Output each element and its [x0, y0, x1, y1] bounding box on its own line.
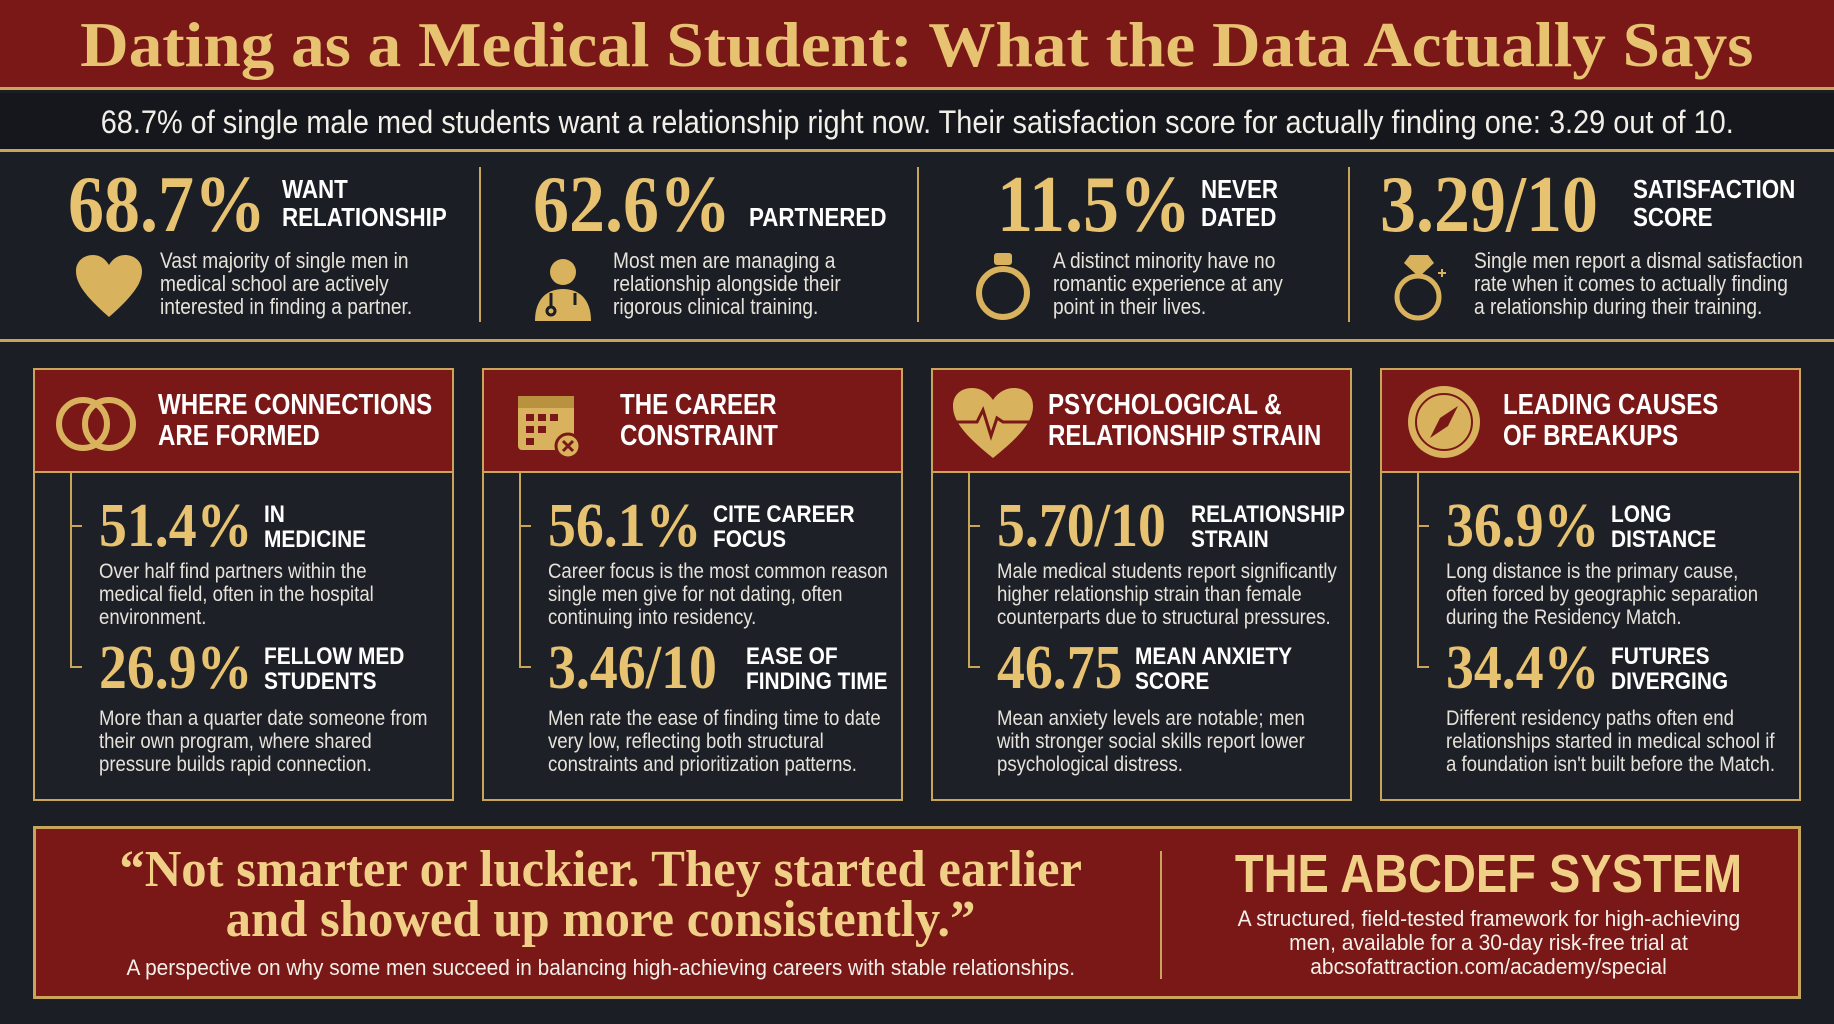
panel: career constraint: Men rate the ease of finding time to date: [548, 707, 881, 730]
panel: career constraint: very low, reflecting both structural: [548, 730, 824, 753]
panel: where connections are formed: MEDICINE: [264, 526, 366, 553]
ABCDEF system: A structured, field-tested framework for high-achieving: [1237, 906, 1740, 931]
panel: where connections are formed: 51.4%: [99, 492, 252, 560]
icon: ring: [976, 253, 1030, 320]
stat: never dated: NEVER: [1201, 174, 1278, 204]
panel: career constraint: THE CAREER: [620, 389, 776, 421]
panel: psychological strain: counterparts due to structural pressures.: [997, 606, 1331, 629]
quote caption: A perspective on why some men succeed in balancing high-achieving careers with stable relationships.: [127, 955, 1075, 980]
panel: where connections are formed: Over half find partners within the: [99, 560, 367, 583]
title: Dating as a Medical Student: What the Data Actually Says: [80, 9, 1754, 80]
stat: never dated: [976, 161, 1283, 320]
stat: 3.46/10: [548, 634, 888, 702]
icon: heart: [76, 255, 142, 317]
stat: want relationship: WANT: [282, 174, 348, 204]
panel: where connections are formed: pressure builds rapid connection.: [99, 753, 372, 776]
stat: satisfaction: 3.29/10: [1380, 161, 1598, 249]
stat: satisfaction: SCORE: [1633, 202, 1713, 232]
stat: partnered: PARTNERED: [749, 202, 886, 232]
panel: psychological strain: 5.70/10: [997, 492, 1166, 560]
stat: 5.70/10: [997, 492, 1345, 560]
panel: leading causes of breakups: Different residency paths often end: [1446, 707, 1734, 730]
stat: never dated: 11.5%: [997, 161, 1191, 249]
stat: satisfaction: rate when it comes to actually finding: [1474, 271, 1788, 296]
panel: where connections are formed: medical field, often in the hospital: [99, 583, 374, 606]
panel: career constraint: 3.46/10: [548, 634, 717, 702]
panel: psychological strain: STRAIN: [1191, 526, 1269, 553]
ABCDEF system: abcsofattraction.com/academy/special: [1310, 954, 1667, 979]
panel: where connections are formed: STUDENTS: [264, 668, 377, 695]
stat: satisfaction: Single men report a dismal satisfaction: [1474, 248, 1803, 273]
stat: partnered: Most men are managing a: [613, 248, 835, 273]
panel: where connections are formed: 26.9%: [99, 634, 252, 702]
panel: psychological strain: MEAN ANXIETY: [1135, 643, 1292, 670]
ABCDEF system: men, available for a 30-day risk-free trial at: [1289, 930, 1688, 955]
panel: leading causes of breakups: [1380, 368, 1801, 801]
ABCDEF system: THE ABCDEF SYSTEM: [1235, 844, 1742, 904]
panel: where connections are formed: [33, 368, 454, 801]
panel: leading causes of breakups: LEADING CAUSES: [1503, 389, 1718, 421]
stat: want relationship: [68, 161, 447, 319]
quote: [120, 841, 1082, 948]
quote: “Not smarter or luckier. They started earlier: [120, 841, 1082, 898]
panel: leading causes of breakups: FUTURES: [1611, 643, 1710, 670]
panel: leading causes of breakups: relationships started in medical school if: [1446, 730, 1775, 753]
stat: never dated: A distinct minority have no: [1053, 248, 1275, 273]
stat: partnered: [533, 161, 886, 321]
panel: career constraint: constraints and prioritization patterns.: [548, 753, 857, 776]
subtitle band: [0, 93, 1834, 152]
stat: partnered: relationship alongside their: [613, 271, 841, 296]
stat: want relationship: Vast majority of single men in: [160, 248, 409, 273]
stat: satisfaction: SATISFACTION: [1633, 174, 1795, 204]
callout: bottom banner: [33, 826, 1801, 999]
panel: career constraint: FOCUS: [713, 526, 786, 553]
panel: career constraint: single men give for not dating, often: [548, 583, 842, 606]
panel: career constraint: CONSTRAINT: [620, 420, 778, 452]
stat: want relationship: 68.7%: [68, 161, 266, 249]
stat: 26.9%: [99, 634, 404, 702]
stat: 46.75: [997, 634, 1292, 702]
panel: leading causes of breakups: Long distance is the primary cause,: [1446, 560, 1738, 583]
stat: want relationship: medical school are actively: [160, 271, 389, 296]
panel header: WHERE CONNECTIONS: [158, 389, 432, 421]
title banner: [0, 0, 1834, 90]
panel: career constraint: continuing into residency.: [548, 606, 756, 629]
panel: career constraint: CITE CAREER: [713, 501, 855, 528]
panel: where connections are formed: IN: [264, 501, 285, 528]
panel: leading causes of breakups: 36.9%: [1446, 492, 1599, 560]
subtitle: 68.7% of single male med students want a relationship right now. Their satisfaction score for actually finding one: 3.29 out of 10.: [100, 104, 1734, 140]
stat: 34.4%: [1446, 634, 1728, 702]
quote: and showed up more consistently.”: [226, 891, 976, 948]
panel: leading causes of breakups: a foundation isn't built before the Match.: [1446, 753, 1775, 776]
stats row: [0, 155, 1834, 342]
stat: never dated: point in their lives.: [1053, 294, 1206, 319]
stat: never dated: DATED: [1201, 202, 1276, 232]
panel: where connections are formed: environment.: [99, 606, 206, 629]
panel: psychological strain: psychological distress.: [997, 753, 1183, 776]
panel: psychological strain: Mean anxiety levels are notable; men: [997, 707, 1305, 730]
panel: psychological strain: with stronger social skills report lower: [997, 730, 1305, 753]
panel header: [35, 370, 452, 473]
panel: where connections are formed: More than a quarter date someone from: [99, 707, 428, 730]
icon: diamond ring: [1394, 255, 1446, 320]
stat: satisfaction: [1380, 161, 1803, 320]
panel: psychological strain: PSYCHOLOGICAL &: [1048, 389, 1282, 421]
stat: never dated: romantic experience at any: [1053, 271, 1283, 296]
panel: psychological strain: 46.75: [997, 634, 1123, 702]
stat: want relationship: RELATIONSHIP: [282, 202, 447, 232]
stat: satisfaction: a relationship during their training.: [1474, 294, 1762, 319]
panel: where connections are formed: FELLOW MED: [264, 643, 404, 670]
panel: leading causes of breakups: during the Residency Match.: [1446, 606, 1682, 629]
stat: want relationship: interested in finding a partner.: [160, 294, 412, 319]
panel: leading causes of breakups: DISTANCE: [1611, 526, 1716, 553]
panel: career constraint: 56.1%: [548, 492, 701, 560]
panel: psychological strain: RELATIONSHIP: [1191, 501, 1345, 528]
panel: psychological strain: Male medical students report significantly: [997, 560, 1337, 583]
stat: partnered: 62.6%: [533, 161, 731, 249]
panel: leading causes of breakups: LONG: [1611, 501, 1671, 528]
icon: doctor: [535, 259, 591, 321]
panel header: ARE FORMED: [158, 420, 320, 452]
panel: career constraint: FINDING TIME: [746, 668, 888, 695]
panel: psychological strain: higher relationship strain than female: [997, 583, 1302, 606]
stat: partnered: rigorous clinical training.: [613, 294, 818, 319]
panel: psychological strain: SCORE: [1135, 668, 1209, 695]
panel: leading causes of breakups: often forced by geographic separation: [1446, 583, 1758, 606]
stat: 56.1%: [548, 492, 855, 560]
panel: leading causes of breakups: OF BREAKUPS: [1503, 420, 1678, 452]
stat: 51.4%: [99, 492, 366, 560]
panel: career constraint: Career focus is the most common reason: [548, 560, 888, 583]
panel: career constraint: [482, 368, 903, 801]
panel: psychological strain: [931, 368, 1352, 801]
panel: career constraint: EASE OF: [746, 643, 838, 670]
stat: 36.9%: [1446, 492, 1716, 560]
ABCDEF system: [1235, 844, 1742, 979]
panel: leading causes of breakups: DIVERGING: [1611, 668, 1728, 695]
panel: leading causes of breakups: 34.4%: [1446, 634, 1599, 702]
panel: where connections are formed: their own program, where shared: [99, 730, 372, 753]
panel: psychological strain: RELATIONSHIP STRAIN: [1048, 420, 1321, 452]
